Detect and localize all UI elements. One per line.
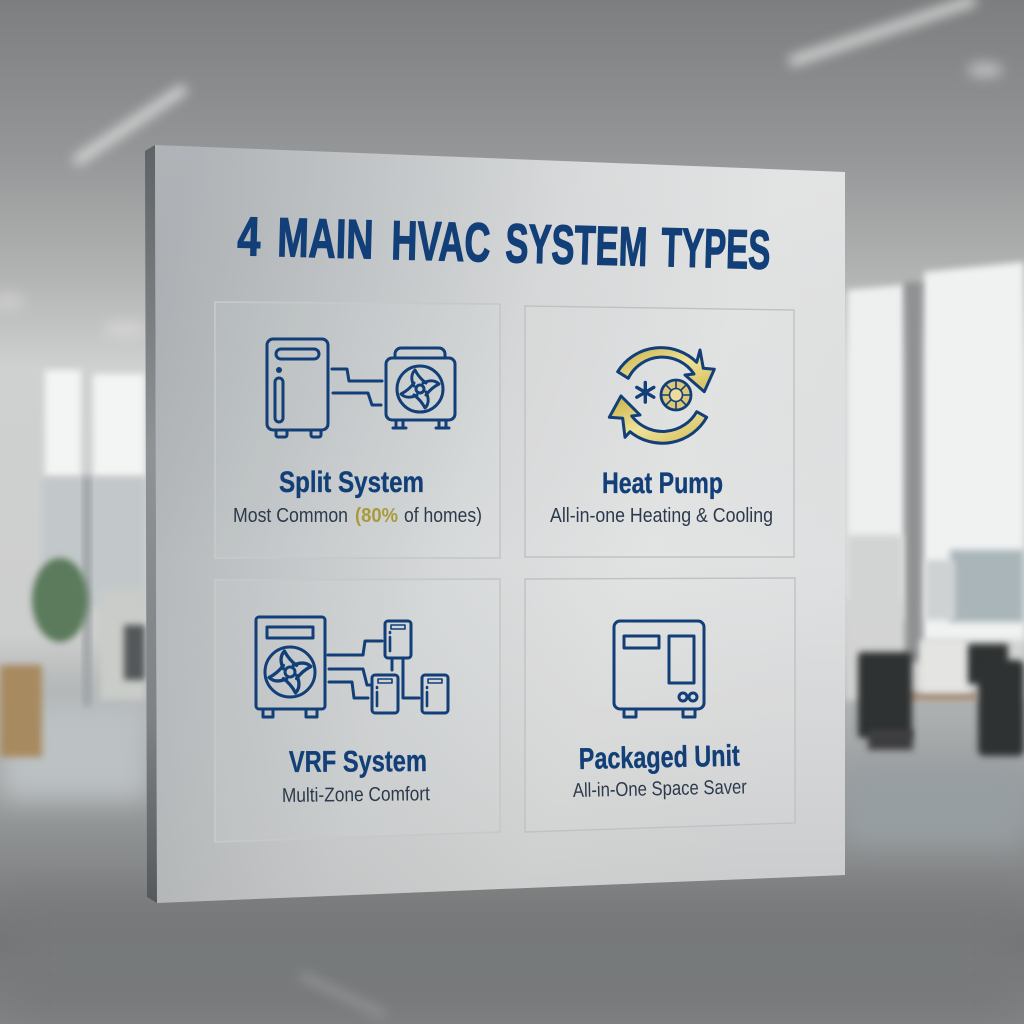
icon: VRF outdoor and indoor units xyxy=(256,617,448,717)
panel: VRF system xyxy=(215,579,500,842)
subtitle: split system: (80% xyxy=(355,505,398,527)
title: MAIN xyxy=(277,206,374,271)
subtitle: split system xyxy=(233,505,482,527)
heading: packaged unit: Packaged Unit xyxy=(578,740,740,776)
subtitle: packaged unit: All-in-One Space Saver xyxy=(573,776,747,802)
title: SYSTEM xyxy=(505,212,648,278)
subtitle: heat pump: All-in-one Heating & Cooling xyxy=(550,505,773,527)
title xyxy=(237,205,771,281)
metal sign plate xyxy=(145,145,845,903)
icon: heat pump cycle arrows xyxy=(609,348,714,443)
title: TYPES xyxy=(661,216,771,281)
panel: packaged unit xyxy=(525,578,795,832)
panel: split system xyxy=(215,302,500,558)
title: 4 xyxy=(237,205,262,268)
subtitle: split system: Most Common xyxy=(233,505,348,527)
panel: heat pump xyxy=(525,306,794,557)
subtitle: VRF system: Multi-Zone Comfort xyxy=(282,783,430,807)
icon: split system units xyxy=(267,339,455,437)
heading: heat pump: Heat Pump xyxy=(602,467,723,500)
heading: VRF system: VRF System xyxy=(289,745,427,779)
heading: split system: Split System xyxy=(279,466,424,499)
subtitle: split system: of homes) xyxy=(404,505,482,527)
icon: packaged unit xyxy=(614,621,704,717)
title: HVAC xyxy=(391,209,491,274)
